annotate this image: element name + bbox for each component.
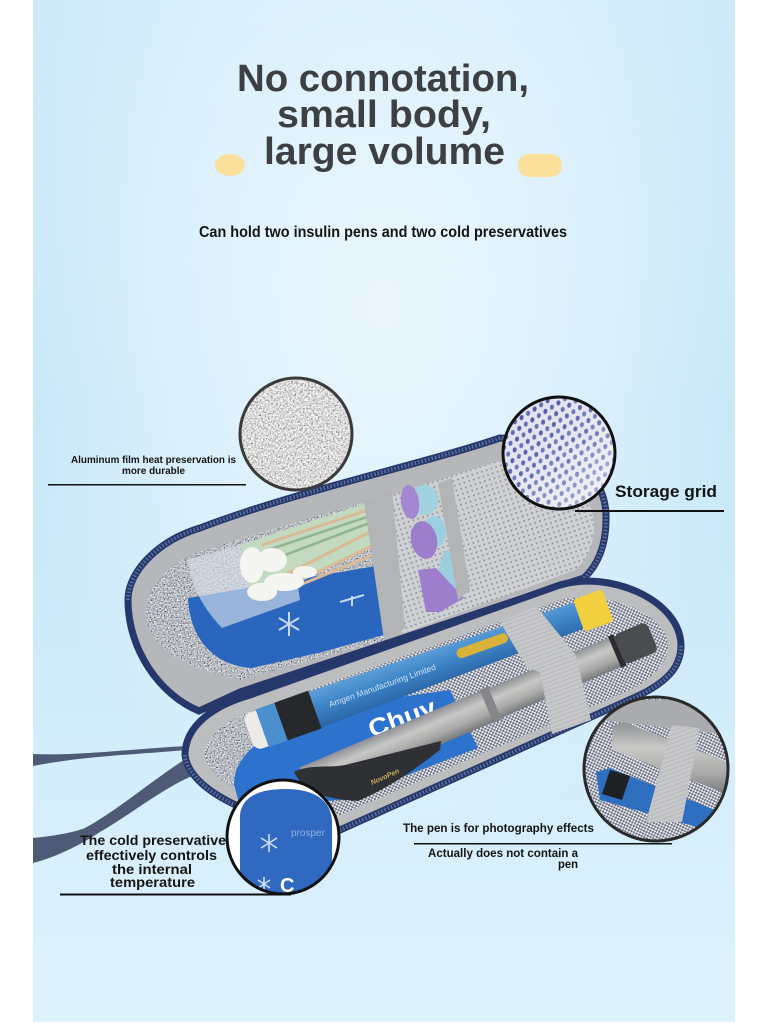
pen note label: The pen is for photography effects	[403, 823, 594, 835]
subtitle: Can hold two insulin pens and two cold preservatives	[199, 224, 567, 241]
title	[237, 58, 529, 173]
foil label: Aluminum film heat preservation is	[71, 455, 236, 466]
cold preservative label: temperature	[110, 874, 195, 890]
foil zoom circle	[240, 378, 352, 490]
lid shell with zipper	[128, 438, 606, 711]
pen zoom circle	[584, 697, 735, 841]
blue lancing pen: Amgen Manufacturing Limited	[327, 662, 437, 709]
strap ribbon	[33, 746, 192, 863]
elastic strap	[500, 606, 591, 734]
cold pack zoom circle: C	[280, 875, 294, 897]
clear bag	[188, 530, 300, 628]
lancets	[399, 484, 464, 612]
title: No connotation,	[237, 58, 529, 100]
blue lancing pen	[242, 586, 615, 752]
right grey band	[438, 478, 470, 600]
decorative yellow blob right	[518, 154, 562, 177]
pen note label: pen	[558, 859, 578, 871]
foil label	[71, 455, 236, 477]
storage mesh	[385, 462, 594, 634]
callout: storage grid	[503, 397, 724, 512]
title: large volume	[264, 131, 505, 173]
pen note label: Actually does not contain a	[428, 848, 579, 860]
callout: cold preservative	[60, 780, 339, 900]
callout: aluminum film	[48, 378, 352, 490]
pen clip	[294, 741, 441, 801]
foil lining in tray	[207, 695, 300, 810]
insulated foil lining	[146, 500, 385, 680]
grey pocket band	[364, 490, 405, 640]
cold pack zoom circle	[227, 780, 339, 900]
title: small body,	[277, 94, 491, 136]
cold preservative label	[80, 832, 226, 890]
grid zoom circle	[503, 397, 615, 509]
grid label: Storage grid	[615, 482, 717, 501]
tray shell with zipper	[185, 581, 681, 830]
insulin case upper lid	[128, 438, 606, 711]
cold pack zoom circle: prosper	[291, 828, 326, 839]
decorative yellow blob left	[215, 154, 245, 176]
cold pack in lid	[188, 565, 384, 668]
insulin case lower tray	[185, 581, 681, 830]
tray mesh lining	[205, 597, 668, 815]
cold pack in tray	[234, 690, 478, 806]
cold preservative label: the internal	[112, 861, 192, 877]
cold preservative label: effectively controls	[86, 847, 217, 863]
callout: pen note	[403, 697, 735, 871]
cold preservative label: The cold preservative	[80, 832, 226, 848]
silver insulin pen	[299, 620, 659, 800]
pen brand text: NovoPen	[370, 768, 401, 787]
cotton swabs	[240, 503, 380, 601]
pen note label	[403, 823, 594, 871]
foil label: more durable	[122, 466, 185, 477]
snowflake on cold pack	[279, 612, 299, 636]
cold pack in tray: Chuv	[364, 693, 440, 744]
